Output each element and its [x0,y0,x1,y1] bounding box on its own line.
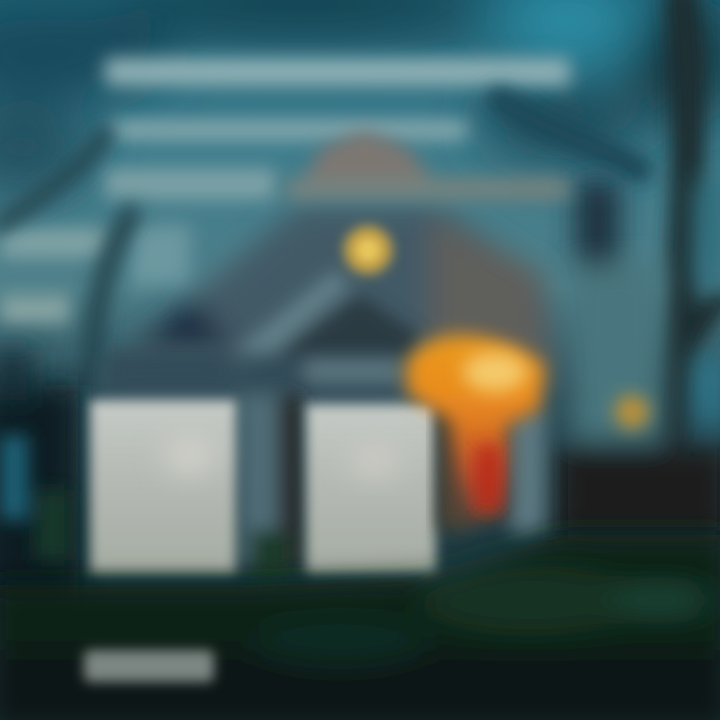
garage door: left [90,400,236,574]
entry: right column [510,410,546,535]
entry: orange glow [405,335,545,525]
dark left edge and tree line [0,350,78,615]
lantern: right wall [615,395,649,429]
sky highlights [0,58,570,323]
left teal patch [0,435,70,560]
watermark label [84,650,214,682]
house: lit round window [344,226,392,274]
right side wall and trees [555,180,720,540]
entry: dark frame [438,400,468,530]
trees: dark branches [0,0,720,440]
house: central column [240,395,302,580]
house: roof cupola [285,130,570,200]
house [90,130,649,580]
garage door: right [306,404,436,574]
door sheen [164,435,401,478]
foreground hedge [0,535,720,720]
house: upper gable wall [100,205,560,400]
house: porch gable and beams [105,270,420,395]
